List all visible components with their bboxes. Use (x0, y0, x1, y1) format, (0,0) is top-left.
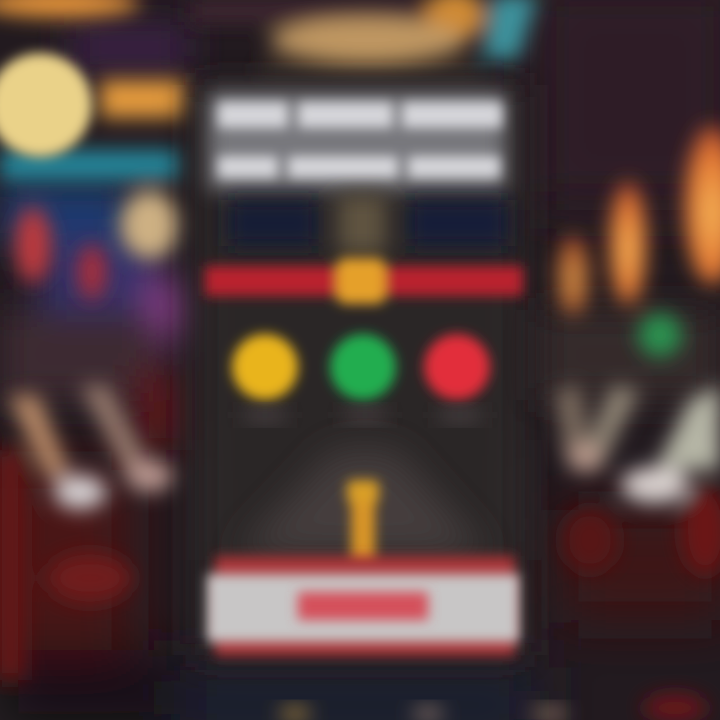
pale diagonal bars (8, 395, 70, 480)
red callout text block (298, 592, 428, 620)
red banner (205, 258, 523, 304)
panel: left decorative scene (0, 0, 190, 680)
panel: right decorative scene (540, 125, 720, 720)
cream corner (120, 191, 180, 259)
green light (330, 334, 396, 400)
bottom callout box (207, 556, 519, 656)
yellow light (232, 334, 298, 400)
top-left orange shape (0, 0, 140, 17)
bottom glow marks (279, 706, 568, 720)
flames (684, 125, 720, 285)
orange stripe (100, 80, 185, 118)
teal stripe (0, 150, 180, 180)
lights row (232, 334, 490, 400)
heading block (208, 92, 506, 190)
navy panels (228, 195, 508, 253)
label shadows under lights (245, 408, 480, 422)
red blobs (15, 207, 51, 283)
green glow (638, 313, 682, 357)
red light (424, 334, 490, 400)
cream circle (0, 53, 92, 157)
panel: top centre dome (190, 0, 538, 78)
road with perspective (235, 450, 490, 555)
panel: central sign (195, 85, 525, 656)
pale bars (555, 385, 590, 455)
yellow figure (347, 480, 379, 566)
